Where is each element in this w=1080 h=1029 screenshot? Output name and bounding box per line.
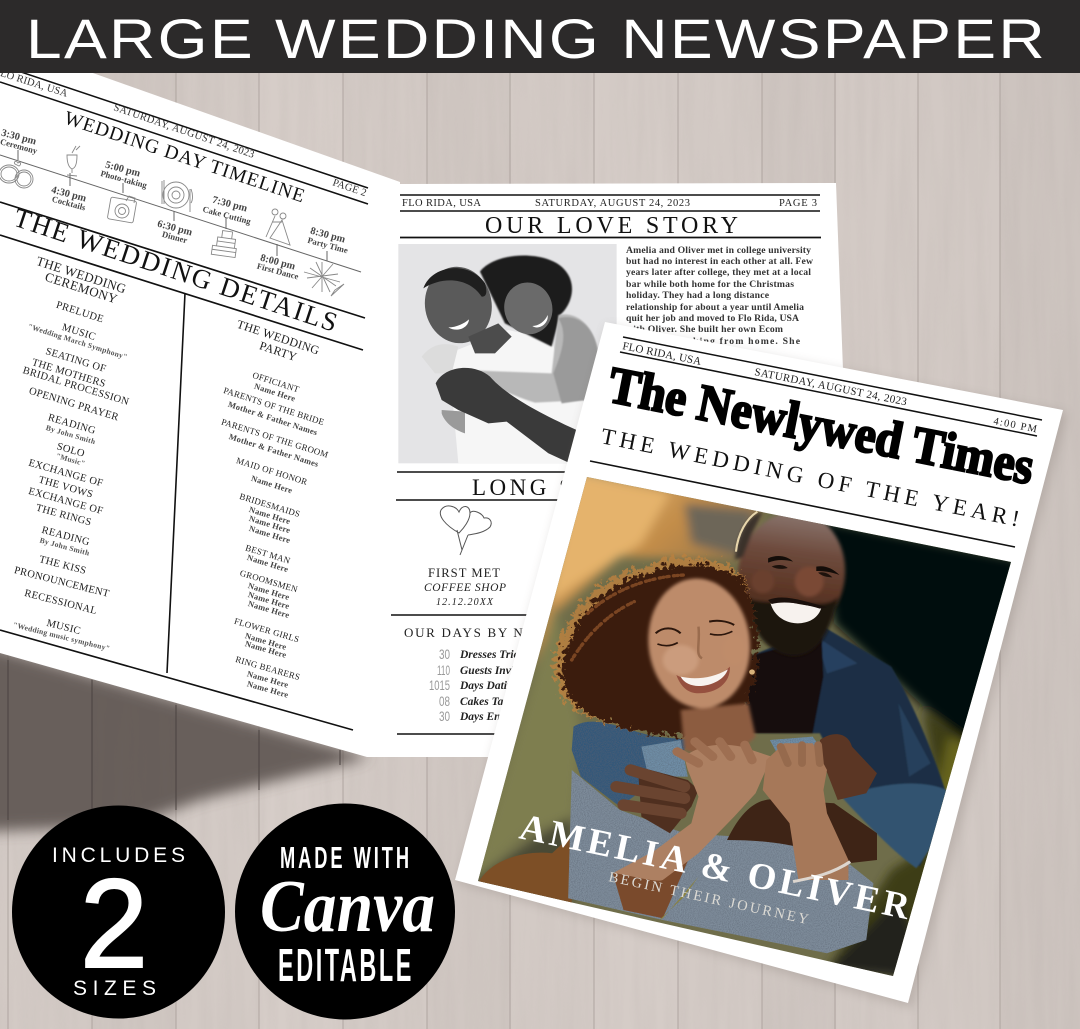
column: the wedding party: MAID OF HONOR [235, 455, 309, 487]
badge: made with canva editable: EDITABLE [278, 939, 414, 991]
shadow plank lines [8, 660, 340, 820]
column: the wedding ceremony: THE WEDDING [35, 253, 128, 296]
section: our days by numbers: Days Dating [459, 680, 519, 692]
column: the wedding party: PARENTS OF THE BRIDE [222, 385, 326, 427]
column: the wedding party: Name Here [244, 631, 288, 652]
title: large wedding newspaper: LARGE WEDDING NEWSPAPER [26, 7, 1047, 70]
story text: years later after college, they met at a local [626, 267, 811, 278]
timeline: Dinner [161, 229, 189, 245]
timeline: 8:00 pm [259, 253, 297, 273]
column: the wedding ceremony [12, 253, 130, 653]
woman's chest [613, 861, 688, 918]
column: the wedding ceremony: CEREMONY [43, 269, 120, 307]
section: our days by numbers: 30 [439, 646, 450, 662]
column: the wedding party: FLOWER GIRLS [233, 616, 301, 644]
shadow beneath left page [0, 640, 370, 832]
column divider and bottom rule [0, 293, 353, 730]
story text: with Oliver. She built her own Ecom [626, 324, 783, 335]
section: our days by numbers [391, 615, 700, 734]
front page shadow [457, 325, 1067, 1008]
page 2: wedding day timeline and details [0, 40, 400, 757]
page 2 masthead: PAGE 2 [331, 177, 368, 199]
column: the wedding party: Name Here [250, 474, 294, 495]
timeline: Cocktails [51, 194, 87, 213]
badge: made with canva editable: MADE WITH [280, 840, 412, 875]
milestone: first met [424, 566, 506, 608]
column: the wedding ceremony: "Music" [55, 451, 86, 468]
column: the wedding ceremony: THE VOWS [37, 475, 94, 501]
front page masthead strip: SATURDAY, AUGUST 24, 2023 [753, 366, 908, 408]
tagline: BEGIN THEIR JOURNEY [607, 869, 810, 928]
man's left arm [572, 722, 691, 807]
cover photo: couple embracing [470, 470, 1030, 990]
badge: includes 2 sizes: INCLUDES [52, 844, 185, 867]
column: the wedding party: RING BEARERS [234, 654, 301, 682]
column: the wedding ceremony: "Wedding music symphony" [12, 620, 111, 653]
column: the wedding ceremony: MUSIC [61, 322, 97, 343]
timeline [0, 128, 361, 296]
story text: business working from home. She [626, 336, 801, 347]
man's head [733, 512, 848, 654]
couple names: AMELIA & OLIVER [516, 807, 914, 928]
page 3 masthead: PAGE 3 [779, 198, 817, 209]
column: the wedding ceremony: THE MOTHERS [31, 357, 107, 390]
column: the wedding party: Name Here [247, 599, 291, 620]
column: the wedding ceremony: SEATING OF [44, 346, 107, 375]
story text: holiday. They had a long distance [626, 290, 770, 301]
page 3 masthead: FLO RIDA, USA [402, 198, 481, 209]
column: the wedding ceremony: "Wedding March Symphony" [27, 322, 129, 362]
timeline: 8:30 pm [309, 226, 347, 246]
column: the wedding party: BRIDESMAIDS [238, 491, 301, 519]
story text: quit her job and moved to Flo Rida, USA [626, 313, 799, 324]
icon: camera [107, 196, 137, 223]
column: the wedding ceremony: PRONOUNCEMENT [13, 565, 111, 600]
column: the wedding ceremony: READING [40, 525, 91, 548]
icon: plate [162, 180, 192, 212]
section: our days by numbers: 1015 [429, 677, 450, 693]
page 2 masthead [0, 65, 368, 204]
front page: the newlywed times [455, 322, 1063, 1003]
newspaper title: The Newlywed Times [604, 357, 1039, 496]
timeline: 3:30 pm [0, 128, 38, 148]
photo backdrop [470, 470, 1020, 980]
column: the wedding party: Name Here [248, 514, 292, 535]
column: the wedding party: OFFICIANT [251, 370, 301, 395]
milestone: first met: 12.12.20XX [436, 597, 494, 608]
woman's hands and forearms [613, 745, 772, 881]
timeline: Photo-taking [99, 168, 149, 190]
column: the wedding party: Name Here [246, 679, 290, 700]
icon: fireworks [304, 262, 344, 296]
man's hands [638, 767, 698, 833]
timeline: Ceremony [0, 136, 39, 156]
timeline: Cake Cutting [202, 204, 253, 227]
headline: THE WEDDING OF THE YEAR! [599, 423, 1022, 531]
story text [626, 245, 813, 347]
heading: the wedding details: THE WEDDING DETAILS [10, 202, 341, 338]
milestone: first met: COFFEE SHOP [424, 582, 506, 594]
badge: includes 2 sizes [12, 806, 225, 1018]
column: the wedding ceremony: By John Smith [39, 536, 91, 558]
story text: relationship for about a year until Amelia [626, 302, 804, 313]
column: the wedding party: Name Here [246, 553, 290, 574]
column: the wedding ceremony: EXCHANGE OF [27, 458, 104, 490]
front page masthead strip: 4:00 PM [992, 416, 1038, 435]
story text: bar while both home for the Christmas [626, 279, 794, 290]
heading: long story: LONG STORY SHORT [472, 475, 750, 500]
woman's face [643, 574, 756, 763]
column: the wedding ceremony: READING [46, 412, 97, 437]
column: the wedding ceremony: THE KISS [38, 554, 87, 577]
column: the wedding party [220, 317, 330, 700]
badge: made with canva editable: Canva [260, 866, 435, 948]
heading: long story [396, 472, 822, 500]
section: our days by numbers: Guests Invited [460, 665, 528, 677]
header bar [0, 0, 1080, 73]
icon: heart balloons [440, 506, 491, 555]
bag [479, 837, 572, 903]
section: our days by numbers: Days Engaged [459, 711, 529, 723]
column: the wedding party: PARTY [258, 338, 299, 364]
column: the wedding party: PARENTS OF THE GROOM [220, 417, 330, 460]
column: the wedding party: Name Here [248, 524, 292, 545]
woman's sweater [568, 770, 873, 953]
column: the wedding party: BEST MAN [244, 543, 292, 566]
timeline: 7:30 pm [211, 195, 249, 215]
icon: dancers [266, 209, 290, 245]
badge: made with canva editable [235, 804, 455, 1020]
milestone: first met: FIRST MET [428, 566, 500, 580]
story text: Amelia and Oliver met in college university [626, 245, 811, 256]
section: our days by numbers: 30 [439, 708, 450, 724]
story text: but had no interest in each other at all. Few [626, 256, 813, 267]
column: the wedding party: Mother & Father Names [227, 400, 319, 438]
icon: rings [0, 161, 33, 188]
icon: cake [211, 229, 239, 258]
timeline: Party Time [306, 235, 349, 255]
column: the wedding ceremony: By John Smith [45, 423, 97, 446]
column: the wedding ceremony: BRIDAL PROCESSION [21, 365, 130, 408]
page 3: our love story [367, 180, 843, 757]
column: the wedding party: Name Here [247, 590, 291, 611]
photo: couple in black and white [398, 244, 617, 463]
man's torso [745, 627, 948, 868]
column: the wedding ceremony: PRELUDE [55, 300, 105, 325]
badge: includes 2 sizes: SIZES [73, 977, 156, 1000]
badge: includes 2 sizes: 2 [80, 853, 148, 994]
column: the wedding ceremony: RECESSIONAL [23, 588, 98, 617]
page 3 masthead [400, 195, 820, 211]
timeline: 6:30 pm [156, 219, 194, 239]
section: our days by numbers: 110 [437, 662, 450, 678]
column: the wedding party: GROOMSMEN [239, 568, 299, 595]
section: our days by numbers: Cakes Tasted [460, 696, 522, 708]
column: the wedding ceremony: SOLO [55, 441, 86, 460]
section: our days by numbers: OUR DAYS BY NUMBERS [404, 625, 588, 640]
column: the wedding party: Name Here [247, 581, 291, 602]
timeline: 4:30 pm [50, 185, 88, 205]
column: the wedding party: Name Here [253, 382, 297, 404]
section: our days by numbers: 08 [439, 693, 450, 709]
column: the wedding party: THE WEDDING [235, 317, 321, 358]
heading: our love story: OUR LOVE STORY [485, 213, 738, 239]
column: the wedding party: Mother & Father Names [228, 432, 320, 469]
woman's hair [550, 554, 754, 733]
column: the wedding ceremony: EXCHANGE OF [27, 486, 104, 517]
timeline: First Dance [256, 261, 300, 282]
column: the wedding ceremony: THE RINGS [35, 503, 93, 529]
column: the wedding ceremony: OPENING PRAYER [27, 386, 120, 424]
section: our days by numbers: Dresses Tried [459, 649, 525, 661]
page 3 masthead: SATURDAY, AUGUST 24, 2023 [535, 198, 690, 209]
heading: wedding day timeline: WEDDING DAY TIMELINE [61, 108, 307, 207]
timeline: 5:00 pm [104, 160, 142, 180]
front page masthead strip [620, 337, 1042, 436]
column: the wedding ceremony: MUSIC [45, 618, 82, 637]
icon: cocktail [67, 146, 80, 176]
page 2 masthead: SATURDAY, AUGUST 24, 2023 [112, 102, 256, 161]
column: the wedding party: Name Here [246, 669, 290, 690]
column: the wedding party: Name Here [244, 639, 288, 660]
front page masthead strip: FLO RIDA, USA [621, 340, 702, 368]
column: the wedding party: Name Here [248, 505, 292, 526]
